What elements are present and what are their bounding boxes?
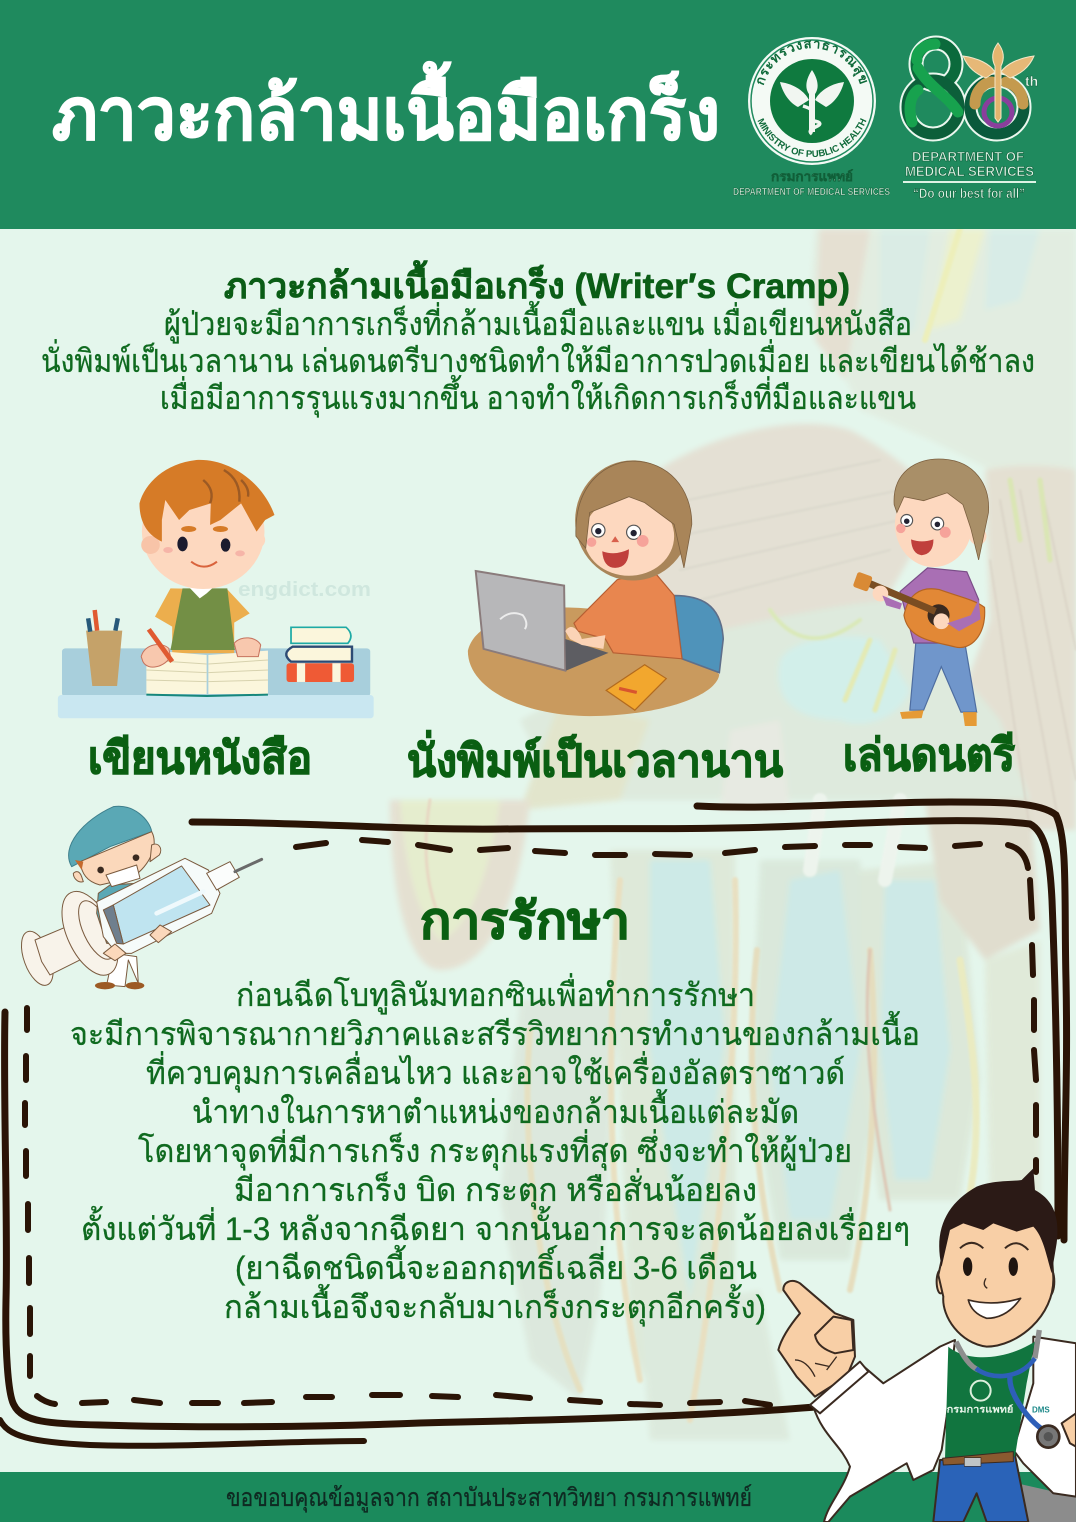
logo caption: anniversary motto: DEPARTMENT OF bbox=[912, 149, 1024, 164]
logo caption: department name: DEPARTMENT OF MEDICAL SERVICES bbox=[733, 187, 890, 198]
logo caption: department name bbox=[733, 169, 890, 198]
body line 9: กล้ามเนื้อจึงจะกลับมาเกร็งกระตุกอีกครั้ง) bbox=[224, 1284, 766, 1327]
logo: Ministry of Public Health seal bbox=[748, 37, 876, 165]
treatment heading: การรักษา bbox=[420, 893, 630, 949]
body line 7: ตั้งแต่วันที่ 1-3 หลังจากฉีดยา จากนั้นอาการจะลดน้อยลงเรื่อยๆ bbox=[81, 1206, 910, 1247]
illustration: boy writing at desk bbox=[58, 460, 374, 718]
footer band bbox=[0, 1472, 1076, 1522]
footer credit: ขอขอบคุณข้อมูลจาก สถาบันประสาทวิทยา กรมการแพทย์ bbox=[226, 1484, 752, 1513]
body line 2: จะมีการพิจารณากายวิภาคและสรีรวิทยาการทำงานของกล้ามเนื้อ bbox=[70, 1011, 920, 1052]
body line 5: โดยหาจุดที่มีการเกร็ง กระตุกแรงที่สุด ซึ่งจะทำให้ผู้ป่วย bbox=[138, 1129, 852, 1171]
logo caption: anniversary motto: MEDICAL SERVICES bbox=[905, 163, 1034, 179]
illustration: cartoon doctor mascot: DMS bbox=[1032, 1405, 1050, 1414]
body line 4: นำทางในการหาตำแหน่งของกล้ามเนื้อแต่ละมัด bbox=[192, 1089, 799, 1130]
treatment body text bbox=[70, 973, 920, 1327]
label: typing for long periods: นั่งพิมพ์เป็นเวลานาน bbox=[407, 730, 783, 786]
logo caption: anniversary motto: “Do our best for all” bbox=[913, 185, 1025, 201]
intro heading: ภาวะกล้ามเนื้อมือเกร็ง (Writer′s Cramp) bbox=[224, 260, 850, 306]
illustration: cartoon doctor mascot: กรมการแพทย์ bbox=[947, 1403, 1013, 1414]
body line 3: ที่ควบคุมการเคลื่อนไหว และอาจใช้เครื่องอัลตราซาวด์ bbox=[146, 1051, 845, 1093]
logo: Ministry of Public Health seal: MINISTRY OF PUBLIC HEALTH bbox=[758, 118, 866, 157]
header band bbox=[0, 0, 1076, 229]
illustration: nurse holding syringe bbox=[15, 806, 262, 989]
logo: 80th anniversary bbox=[907, 43, 1038, 134]
illustration: child typing on laptop bbox=[468, 460, 723, 716]
background: faded hand anatomy illustration bbox=[390, 229, 1076, 1440]
body line 1: ก่อนฉีดโบทูลินัมทอกซินเพื่อทำการรักษา bbox=[236, 973, 755, 1015]
treatment panel: hand-drawn frame bbox=[0, 802, 1067, 1446]
illustration: child playing guitar bbox=[853, 459, 989, 726]
intro text block bbox=[41, 260, 1035, 418]
illustration: faint watermark: engdict.com bbox=[238, 579, 371, 601]
logo: 80th anniversary: th bbox=[1025, 73, 1038, 89]
intro line 1: ผู้ป่วยจะมีอาการเกร็งที่กล้ามเนื้อมือและแขน เมื่อเขียนหนังสือ bbox=[164, 301, 912, 344]
label: playing music: เล่นดนตรี bbox=[843, 731, 1015, 780]
logo caption: department name: กรมการแพทย์ bbox=[771, 169, 853, 184]
body line 6: มีอาการเกร็ง บิด กระตุก หรือสั่นน้อยลง bbox=[234, 1168, 757, 1210]
logo caption: anniversary motto bbox=[903, 149, 1036, 201]
intro line 3: เมื่อมีอาการรุนแรงมากขึ้น อาจทำให้เกิดการเกร็งที่มือและแขน bbox=[160, 375, 916, 418]
body line 8: (ยาฉีดชนิดนี้จะออกฤทธิ์เฉลี่ย 3-6 เดือน bbox=[235, 1245, 757, 1286]
logo: Ministry of Public Health seal: กระทรวงสาธารณสุข bbox=[757, 40, 868, 86]
illustration: cartoon doctor mascot bbox=[778, 1168, 1076, 1522]
label: writing: เขียนหนังสือ bbox=[88, 734, 312, 783]
title: ภาวะกล้ามเนื้อมือเกร็ง bbox=[52, 61, 720, 155]
